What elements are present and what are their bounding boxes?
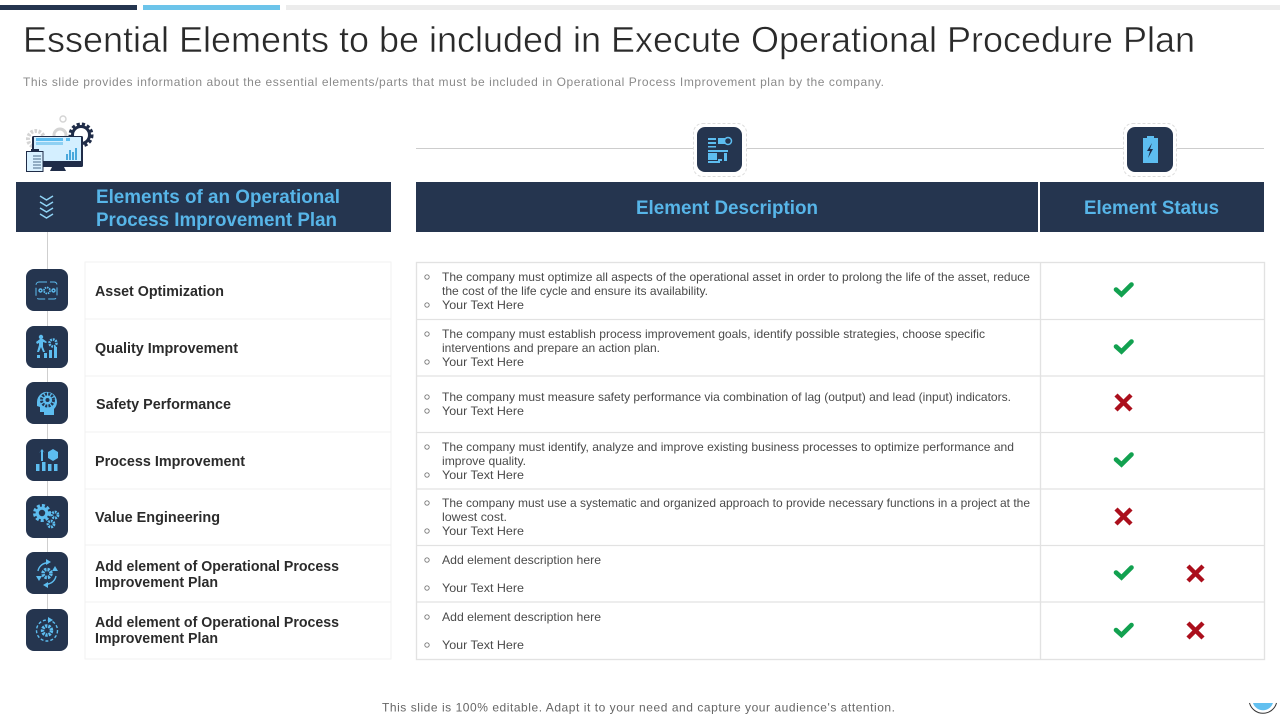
heading: element description: Element Description — [636, 197, 818, 219]
row 1 description: The company must optimize all aspects of the operational asset in order to prolong the life of the asset, reduce — [442, 270, 1030, 284]
row 5 description: lowest cost. — [442, 510, 507, 524]
footer note: This slide is 100% editable. Adapt it to your need and capture your audience's attention. — [382, 700, 895, 714]
label: add element row 6: Add element of Operational Process — [95, 559, 339, 575]
row 5 description: Your Text Here — [442, 524, 524, 538]
subtitle: This slide provides information about the essential elements/parts that must be included in Operational Process Improvement plan by the company. — [23, 75, 884, 89]
icon: monitor, clipboard and gears — [26, 116, 92, 172]
heading: element status — [1040, 182, 1264, 232]
heading: elements of an operational process improvement plan — [16, 182, 391, 232]
label: asset optimization: Asset Optimization — [95, 284, 224, 300]
row 1 description — [425, 270, 1030, 312]
row 2 description: The company must establish process improvement goals, identify possible strategies, choose specific — [442, 327, 985, 341]
label: add element row 7 — [95, 615, 339, 647]
panel: element names list — [85, 262, 391, 659]
row 4 description: Your Text Here — [442, 468, 524, 482]
row 6 description: Add element description here — [442, 553, 601, 567]
status: row 2 check — [1116, 342, 1132, 352]
icon: safety performance head — [26, 382, 68, 424]
top accent bars — [0, 5, 1280, 10]
status: row 3 cross — [1116, 395, 1131, 410]
row 3 description: The company must measure safety performance via combination of lag (output) and lead (input) indicators. — [442, 390, 1011, 404]
row 5 description — [425, 496, 1030, 538]
row 2 description: Your Text Here — [442, 355, 524, 369]
row 4 description: improve quality. — [442, 454, 526, 468]
row 3 description — [425, 390, 1011, 418]
row 6 description: Your Text Here — [442, 581, 524, 595]
label: quality improvement: Quality Improvement — [95, 341, 238, 357]
row 7 description: Add element description here — [442, 610, 601, 624]
row 7 description — [425, 610, 601, 652]
label: add element row 7: Improvement Plan — [95, 631, 218, 647]
label: add element row 6 — [95, 559, 339, 591]
heading: element status: Element Status — [1084, 197, 1219, 219]
status: row 7 cross — [1188, 623, 1203, 638]
label: safety performance: Safety Performance — [96, 397, 231, 413]
status: row 1 check — [1116, 284, 1132, 294]
label: add element row 7: Add element of Operational Process — [95, 615, 339, 631]
icon: rotating gear — [26, 609, 68, 651]
icon: battery — [1124, 124, 1176, 176]
row 3 description: Your Text Here — [442, 404, 524, 418]
label: add element row 6: Improvement Plan — [95, 575, 218, 591]
row 2 description — [425, 327, 985, 369]
icon: asset optimization — [26, 269, 68, 311]
icon: cycle gear — [26, 552, 68, 594]
row 4 description: The company must identify, analyze and improve existing business processes to optimize performance and — [442, 440, 1014, 454]
icon: process improvement — [26, 439, 68, 481]
row 1 description: Your Text Here — [442, 298, 524, 312]
row 6 description — [425, 553, 601, 595]
status: row 5 cross — [1116, 509, 1131, 524]
status: row 7 check — [1116, 625, 1132, 635]
heading: element description — [416, 182, 1038, 232]
row 1 description: the cost of the life cycle and ensure its availability. — [442, 284, 708, 298]
panel: description and status table — [416, 262, 1264, 660]
status: row 6 check — [1116, 568, 1132, 578]
heading: elements of an operational process improvement plan: Elements of an Operational — [96, 187, 340, 208]
row 2 description: interventions and prepare an action plan. — [442, 341, 660, 355]
label: process improvement: Process Improvement — [95, 454, 245, 470]
title: Essential Elements to be included in Execute Operational Procedure Plan — [23, 19, 1195, 60]
left timeline connector — [46, 232, 48, 625]
page corner badge — [1250, 703, 1276, 713]
row 7 description: Your Text Here — [442, 638, 524, 652]
row 4 description — [425, 440, 1014, 482]
status: row 4 check — [1116, 454, 1132, 464]
icon: chevrons down — [40, 196, 53, 218]
icon: value engineering gears — [26, 496, 68, 538]
icon: blueprint — [694, 124, 746, 176]
icon: quality improvement — [26, 326, 68, 368]
heading: elements of an operational process improvement plan: Process Improvement Plan — [96, 210, 337, 231]
status: row 6 cross — [1188, 566, 1203, 581]
header divider line — [416, 148, 1264, 150]
label: value engineering: Value Engineering — [95, 510, 220, 526]
row 5 description: The company must use a systematic and organized approach to provide necessary functions in a project at the — [442, 496, 1030, 510]
